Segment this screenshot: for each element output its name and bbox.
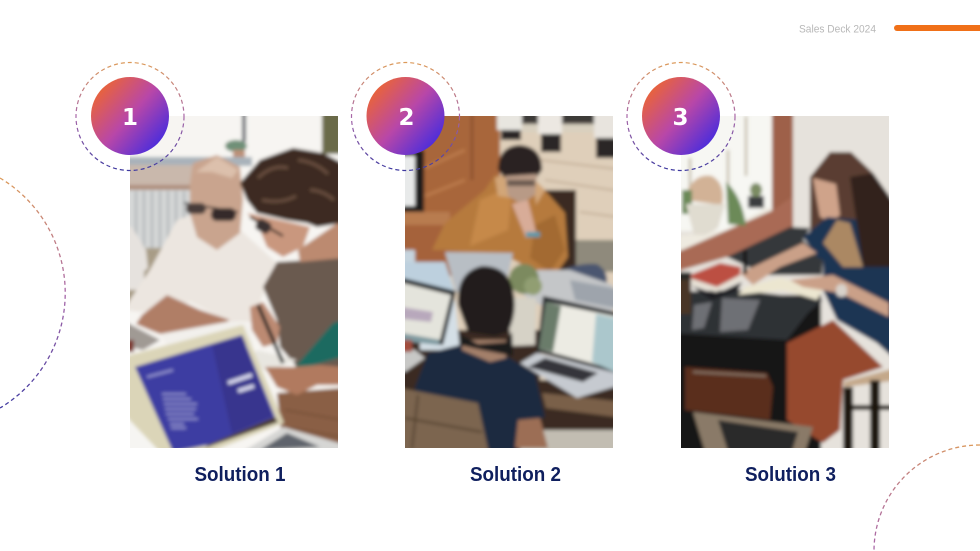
number badge 2	[352, 62, 460, 170]
decorative left dashed arc	[0, 178, 65, 408]
decorative bottom-right dashed arc	[874, 445, 980, 550]
number badge 1	[76, 62, 184, 170]
photo 2: coworkers with laptops	[405, 116, 613, 448]
caption: Solution 1: Solution 1	[194, 464, 286, 486]
caption: Solution 2: Solution 2	[470, 464, 561, 486]
number badge 3: 3	[672, 105, 689, 131]
number badge 1: 1	[122, 105, 138, 131]
header label: Sales Deck 2024	[799, 24, 876, 36]
caption: Solution 3: Solution 3	[745, 464, 836, 486]
number badge 2: 2	[398, 105, 415, 131]
header accent bar	[894, 25, 980, 31]
photo 3: woman writing at a window table	[681, 116, 889, 448]
number badge 3	[627, 62, 735, 170]
photo 1: two men at a laptop	[130, 116, 338, 448]
